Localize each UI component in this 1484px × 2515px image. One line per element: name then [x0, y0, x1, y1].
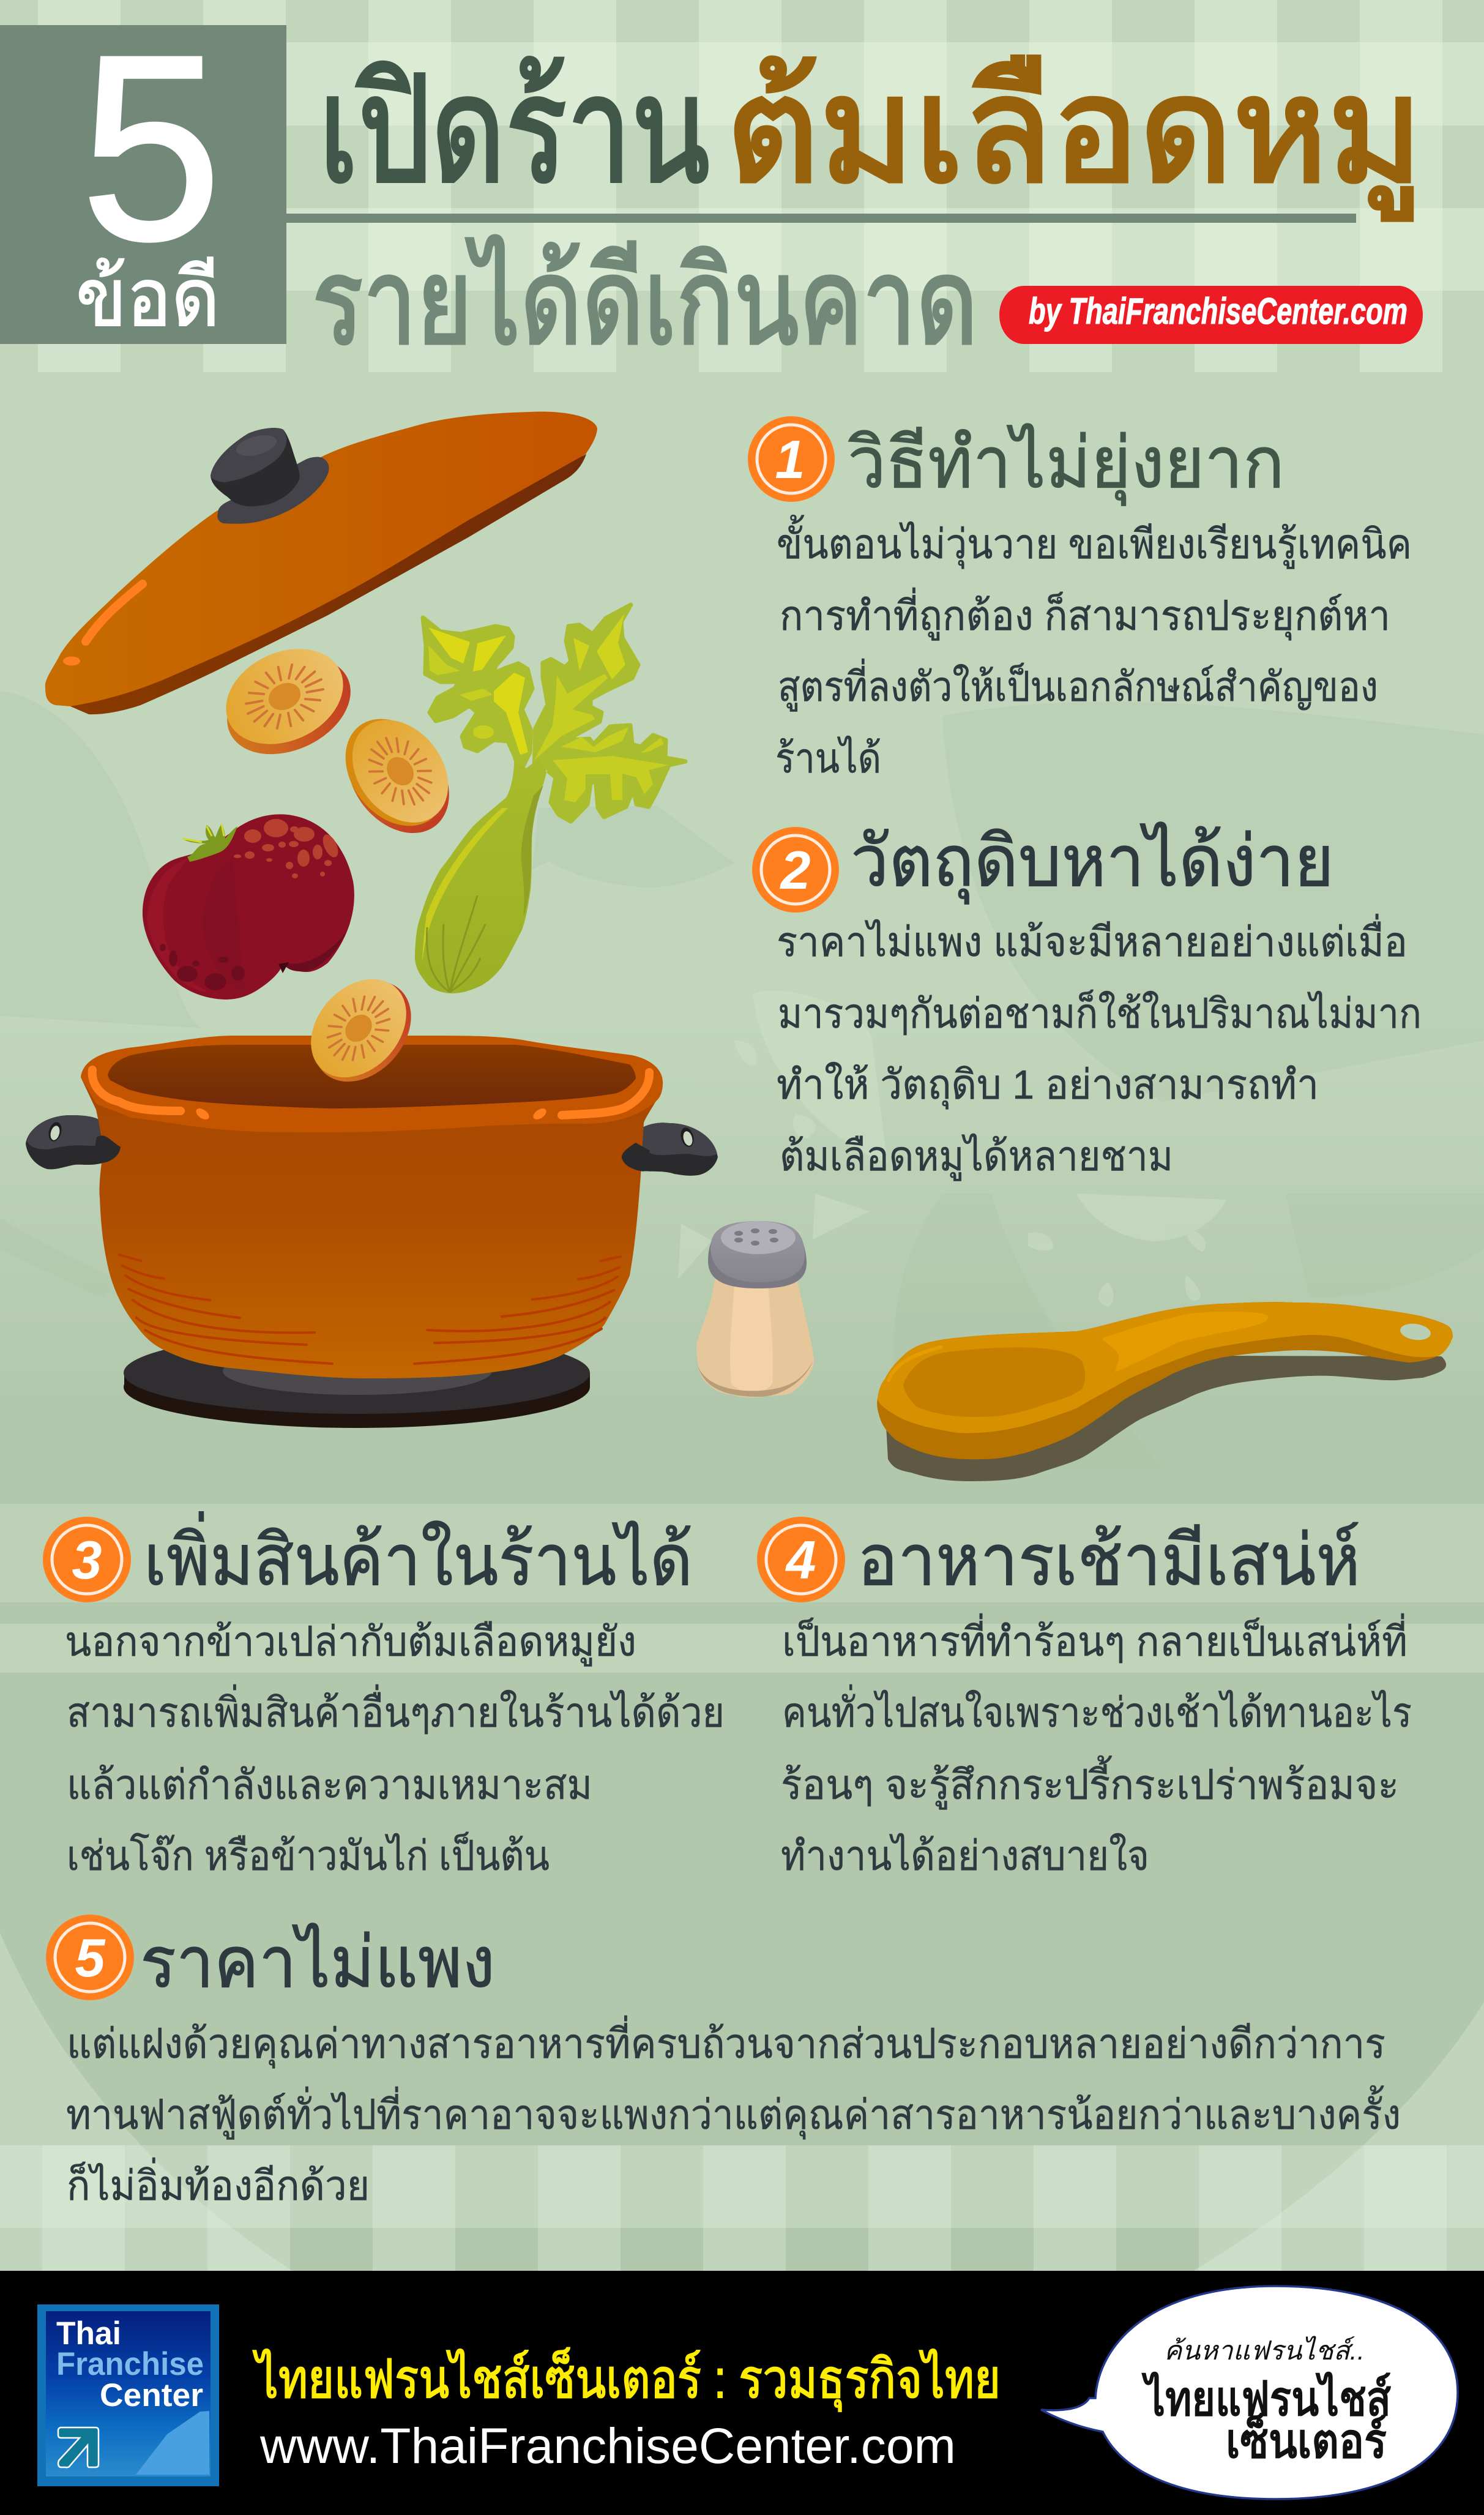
section 2: heading: วัตถุดิบหาได้ง่าย [851, 821, 1334, 905]
section 5: body text: ทานฟาสฟู้ดต์ทั่วไปที่ราคาอาจจะแพงกว่าแต่คุณค่าสารอาหารน้อยกว่าและบางครั้ง [66, 2085, 1401, 2140]
handle fronts over pot [92, 1135, 121, 1164]
pot lines [119, 1255, 621, 1364]
title: เปิดร้าน [319, 48, 710, 213]
subtitle: รายได้ดีเกินคาด [312, 235, 978, 369]
speech bubble: ไทยแฟรนไชส์ [1141, 2371, 1391, 2426]
shaker cap [708, 1221, 807, 1288]
section 3: body text: สามารถเพิ่มสินค้าอื่นๆภายในร้านได้ด้วย [67, 1684, 725, 1736]
section 5: number badge: 5 [75, 1927, 106, 1988]
spoon highlights [889, 1347, 941, 1380]
section 3: heading: เพิ่มสินค้าในร้านได้ [144, 1512, 693, 1600]
section 2: body text: ราคาไม่แพง แม้จะมีหลายอย่างแต่เมื่อ [777, 914, 1408, 965]
title: ต้มเลือดหมู [726, 48, 1423, 220]
section 3: body text: เช่นโจ๊ก หรือข้าวมันไก่ เป็นต้น [67, 1831, 550, 1879]
pot rim [81, 1036, 663, 1132]
mid bands [0, 1504, 1484, 1602]
title [319, 48, 1423, 220]
spoon handle highlight [1102, 1312, 1269, 1372]
section 3: body text: นอกจากข้าวเปล่ากับต้มเลือดหมูยัง [65, 1619, 636, 1667]
illustration: salt shaker [696, 1221, 814, 1397]
spoon bowl [903, 1347, 1085, 1417]
section 1: body text: ขั้นตอนไม่วุ่นวาย ขอเพียงเรียนรู้เทคนิค [777, 515, 1412, 569]
bottom plaid [42, 2145, 1447, 2271]
section 1: number badge: 1 [775, 429, 805, 490]
section 5: number badge [46, 1915, 134, 2000]
beet spots [234, 819, 341, 878]
pot interior [108, 1045, 636, 1108]
section 5: heading: ราคาไม่แพง [140, 1923, 495, 2002]
large circle corners [0, 1933, 293, 2271]
section 4: number badge [757, 1517, 845, 1602]
footer logo: Center [100, 2377, 203, 2413]
illustration: wooden spoon [877, 1302, 1453, 1481]
illustration: celery [415, 605, 685, 993]
section 1: heading: วิธีทำไม่ยุ่งยาก [848, 423, 1285, 506]
section 2: number badge [752, 827, 839, 913]
section 1: body text: การทำที่ถูกต้อง ก็สามารถประยุกต์หา [780, 588, 1390, 641]
section 4: number badge: 4 [785, 1530, 816, 1590]
section 2: number badge: 2 [780, 840, 811, 900]
panel: header block with number 5 [0, 1, 286, 344]
faint leaves [0, 692, 1484, 1469]
section 3: number badge [43, 1517, 131, 1602]
section 1: body text: สูตรที่ลงตัวให้เป็นเอกลักษณ์สำคัญของ [778, 659, 1378, 712]
section 5: body text: ก็ไม่อิ่มท้องอีกด้วย [67, 2158, 370, 2209]
lid highlight [86, 584, 143, 641]
illustration: pot [81, 1036, 663, 1378]
number 5: 5 [81, 1, 222, 295]
section 2: body text [777, 914, 1422, 1181]
footer url: www.ThaiFranchiseCenter.com [259, 2418, 956, 2474]
footer logo [37, 2304, 219, 2486]
speech bubble: เซ็นเตอร์ [1226, 2413, 1387, 2468]
illustration: stove burner [124, 1332, 590, 1428]
section 2: body text: ทำให้ วัตถุดิบ 1 อย่างสามารถทำ [777, 1061, 1319, 1110]
section 3: number badge: 3 [72, 1530, 102, 1590]
pot highlights [92, 1070, 649, 1115]
section 5: body text: แต่แฝงด้วยคุณค่าทางสารอาหารที่ครบถ้วนจากส่วนประกอบหลายอย่างดีกว่าการ [67, 2016, 1385, 2069]
illustration: beetroot [143, 814, 354, 1000]
section 1: body text [775, 515, 1412, 782]
subtitle: five benefits: ข้อดี [76, 253, 220, 343]
section 2: body text: มารวมๆกันต่อชามก็ใช้ในปริมาณไม่มาก [778, 989, 1422, 1037]
section 1: body text: ร้านได้ [775, 735, 881, 782]
section 4: body text: เป็นอาหารที่ทำร้อนๆ กลายเป็นเสน่ห์ที่ [782, 1613, 1408, 1665]
section 4: body text [781, 1613, 1412, 1879]
section 4: body text: ร้อนๆ จะรู้สึกกระปรี้กระเปร่าพร้อมจะ [781, 1755, 1399, 1810]
spoon shadow [886, 1356, 1446, 1481]
section 5: body text [66, 2016, 1401, 2209]
footer tagline: ไทยแฟรนไชส์เซ็นเตอร์ : รวมธุรกิจไทย [253, 2347, 1001, 2412]
illustration: pot handle right [622, 1123, 718, 1176]
beet stem [182, 824, 237, 862]
illustration: orange slice 2 [325, 700, 470, 853]
illustration: orange slice 3 [292, 960, 431, 1101]
section 4: heading: อาหารเช้ามีเสน่ห์ [857, 1520, 1360, 1600]
speech bubble [1041, 2286, 1458, 2499]
section 4: body text: คนทั่วไปสนใจเพราะช่วงเช้าได้ทานอะไร [782, 1684, 1412, 1736]
celery stalk [415, 759, 546, 993]
logo arrow [58, 2427, 99, 2467]
footer bar [0, 2271, 1484, 2515]
footer logo: Thai [56, 2315, 121, 2352]
badge: by ThaiFranchiseCenter.com [999, 286, 1423, 344]
top plaid [38, 0, 1442, 372]
speech bubble: ค้นหาแฟรนไชส์.. [1164, 2336, 1365, 2366]
section 2: body text: ต้มเลือดหมูได้หลายชาม [780, 1133, 1173, 1181]
illustration: pot handle left [26, 1115, 121, 1169]
section 3: body text: แล้วแต่กำลังและความเหมาะสม [67, 1762, 592, 1808]
celery leaves [423, 605, 685, 821]
illustration: orange slice 1 [211, 630, 366, 773]
illustration: pot lid [45, 411, 597, 714]
section 4: body text: ทำงานได้อย่างสบายใจ [781, 1833, 1149, 1879]
lid knob [211, 428, 329, 524]
section 1: number badge [748, 416, 835, 502]
section 3: body text [65, 1619, 725, 1879]
footer logo: Franchise [56, 2346, 204, 2382]
